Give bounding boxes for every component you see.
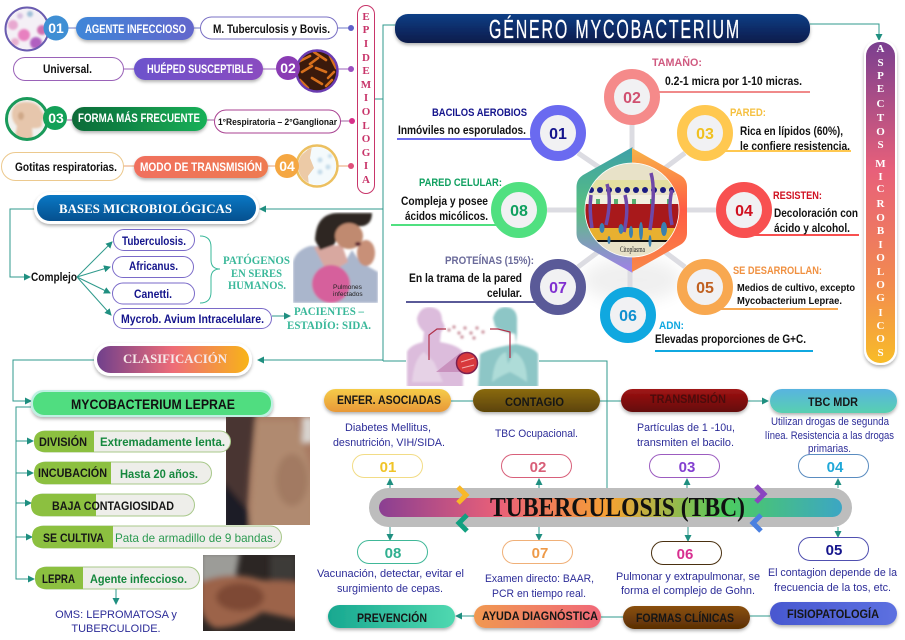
- item 03 pared: PARED:: [730, 107, 766, 119]
- icon ring 4: [296, 146, 338, 186]
- text: ayuda diagnostica detail: Examen directo: BAAR,: [485, 573, 594, 585]
- text: formas clinicas detail: [616, 571, 760, 597]
- text: tbc mdr detail: [765, 416, 894, 455]
- item 02 tamano: TAMAÑO:: [652, 56, 702, 69]
- panel: tuberculosis bottom pills: [328, 602, 897, 629]
- photo: arm lesion 2: [203, 555, 295, 631]
- panel: aspectos microbiologicos: E: [877, 83, 884, 95]
- item 07 proteinas: celular.: [487, 288, 522, 300]
- icon: head: [8, 100, 45, 138]
- dot 4: [348, 163, 354, 169]
- complejo arrows: [77, 242, 112, 315]
- item 05 se desarrollan: Mycobacterium Leprae.: [737, 296, 842, 307]
- item 07 proteinas: 07: [549, 280, 567, 297]
- number 02: 02: [280, 60, 296, 76]
- brace: [200, 236, 220, 303]
- item 05 se desarrollan: SE DESARROLLAN:: [733, 265, 822, 277]
- text: prevencion detail: Vacunación, detectar, evitar el: [317, 568, 464, 580]
- text: prevencion detail: [317, 568, 464, 595]
- hub spokes: [547, 125, 716, 287]
- pill: huesped susceptible: [134, 58, 263, 80]
- icon: microscope cells: [6, 8, 46, 50]
- pill: se cultiva: Pata de armadillo de 9 bandas.: [115, 531, 276, 545]
- pill: tuberculosis: [114, 230, 194, 250]
- panel: aspectos microbiologicos: A: [877, 43, 885, 55]
- number pills bottom: [358, 538, 868, 564]
- panel: aspectos microbiologicos: P: [877, 70, 884, 82]
- pill: tbc mdr: TBC MDR: [808, 397, 859, 409]
- number 01: 01: [48, 20, 64, 36]
- pill: lepra: [35, 567, 200, 589]
- item 04 resisten: 04: [735, 203, 753, 220]
- pill: agente infeccioso: [76, 17, 194, 40]
- icon: bacteria: [298, 52, 336, 90]
- leprae branch lines: [16, 407, 34, 579]
- pill: africanus: [112, 256, 194, 278]
- text: enfer asociadas detail: Diabetes Mellitus,: [345, 422, 431, 434]
- pill: prevencion: PREVENCIÓN: [357, 612, 427, 625]
- pill: division: [34, 431, 230, 452]
- pill 03: 03: [679, 459, 695, 476]
- item 05 se desarrollan: 05: [696, 280, 714, 297]
- arrow: lepra to oms: [115, 589, 117, 604]
- pill: contagio: CONTAGIO: [505, 397, 564, 409]
- photo: arm lesion 1: [226, 417, 310, 525]
- panel: aspectos microbiologicos: I: [878, 171, 883, 183]
- arrows: bar to pills: [390, 479, 838, 541]
- item 02 tamano: 02: [623, 90, 641, 107]
- pill: canetti: Canetti.: [134, 287, 172, 301]
- pill: se cultiva: SE CULTIVA: [43, 533, 104, 545]
- panel: bases microbiologicas: [34, 192, 259, 224]
- item 07 proteinas: [406, 254, 581, 310]
- text: formas clinicas detail: forma el complejo de Gohn.: [621, 585, 755, 597]
- panel: aspectos microbiologicos: B: [877, 225, 885, 237]
- arrow: avium to pacientes: [272, 315, 290, 317]
- pill 08: 08: [385, 545, 401, 562]
- pill 06: [652, 542, 722, 564]
- dot 3: [349, 118, 355, 124]
- pill: tuberculosis: Tuberculosis.: [122, 234, 186, 248]
- panel: aspectos microbiologicos: [864, 40, 897, 365]
- item 08 pared celular: [391, 177, 542, 233]
- pill 06: 06: [677, 546, 693, 563]
- panel: aspectos microbiologicos: S: [877, 57, 884, 69]
- text: patogenos: PATÓGENOS: [223, 253, 290, 267]
- pill: baja contagiosidad: [31, 494, 194, 516]
- panel: epidemiologia vertical label: O: [362, 133, 371, 145]
- pill: tbc mdr: [770, 389, 897, 413]
- pill: modo de transmision: MODO DE TRANSMISIÓN: [140, 159, 262, 174]
- icon ring 2: [296, 50, 338, 92]
- pill: incubacion: Hasta 20 años.: [120, 467, 198, 481]
- pill: baja contagiosidad: BAJA CONTAGIOSIDAD: [52, 501, 174, 513]
- pill: prevencion: [328, 605, 455, 628]
- panel: aspectos microbiologicos: I: [878, 239, 883, 251]
- pill 01: [352, 454, 422, 478]
- pill: lepra: LEPRA: [42, 574, 75, 586]
- text: contagio detail: TBC Ocupacional.: [495, 428, 578, 440]
- panel: epidemiologia vertical label: G: [362, 147, 371, 159]
- panel: epidemiologia vertical label: I: [364, 38, 368, 50]
- pill 04: [798, 454, 868, 478]
- text: ayuda diagnostica detail: PCR en tiempo real.: [492, 588, 586, 600]
- pill 02: [502, 454, 572, 478]
- central bar: tuberculosis: [369, 486, 852, 531]
- panel: aspectos microbiologicos: O: [876, 252, 885, 264]
- pill 03: [650, 454, 720, 478]
- item 02 tamano: [609, 56, 810, 120]
- image: coughing woman: Pulmones: [333, 284, 363, 291]
- number 04: 04: [279, 158, 295, 174]
- text: patogenos: [223, 253, 290, 292]
- pill 07: 07: [532, 545, 548, 562]
- panel: epidemiologia rows: [2, 7, 355, 188]
- panel: epidemiologia vertical label: O: [362, 106, 371, 118]
- dot 2: [348, 66, 354, 72]
- icon ring 3: [6, 98, 48, 140]
- panel: mycobacterium leprae: [31, 390, 273, 417]
- item 01 bacilos aerobios: 01: [549, 126, 567, 143]
- diagram: central hexagon: [577, 148, 687, 272]
- number 01: [44, 16, 68, 40]
- pill 08: [358, 540, 428, 564]
- text: pacientes: [287, 304, 371, 332]
- text: pacientes: PACIENTES –: [294, 304, 365, 318]
- panel: aspectos microbiologicos: C: [877, 98, 885, 110]
- pill: universal: Universal.: [43, 62, 92, 76]
- pill: gotitas: Gotitas respiratorias.: [15, 160, 117, 174]
- pill: formas clinicas: [623, 606, 750, 629]
- text: patogenos: HUMANOS.: [228, 278, 286, 292]
- pill: transmision: TRANSMISIÓN: [650, 393, 726, 406]
- pill 02: 02: [530, 459, 546, 476]
- illustration: airborne transmission lungs: [406, 307, 539, 390]
- panel: tuberculosis top pills: [324, 389, 897, 413]
- item 06 adn: 06: [619, 308, 637, 325]
- text: oms: [55, 609, 177, 635]
- pill: universal: [14, 58, 124, 80]
- pill: transmision: [621, 389, 748, 412]
- panel: epidemiologia vertical label: L: [362, 120, 370, 132]
- image: coughing woman: [293, 212, 378, 303]
- text: ayuda diagnostica detail: [485, 573, 594, 600]
- pill 05: [798, 538, 868, 560]
- text: enfer asociadas detail: desnutrición, VIH/SIDA.: [333, 437, 445, 449]
- panel: aspectos microbiologicos: S: [877, 139, 884, 151]
- item 03 pared: le confiere resistencia.: [740, 141, 850, 153]
- panel: epidemiologia vertical label: P: [363, 24, 370, 36]
- panel: epidemiologia vertical label: I: [364, 92, 368, 104]
- text: prevencion detail: surgimiento de cepas.: [337, 583, 443, 595]
- item 03 pared: [682, 107, 851, 156]
- title: [395, 14, 810, 44]
- row 2 connector: [124, 68, 351, 70]
- pill: agente infeccioso: AGENTE INFECCIOSO: [85, 22, 186, 36]
- row 3 connector: [67, 120, 352, 121]
- item 07 proteinas: En la trama de la pared: [409, 273, 522, 285]
- item 04 resisten: ácido y alcohol.: [774, 223, 850, 235]
- pill: incubacion: [34, 462, 212, 484]
- item 03 pared: Rica en lípidos (60%),: [740, 126, 843, 138]
- dot 1: [348, 25, 354, 31]
- pill: forma mas frecuente: [72, 107, 207, 131]
- panel: epidemiologia vertical label: E: [362, 11, 370, 23]
- pill: division: DIVISIÓN: [39, 436, 87, 449]
- cell wall illustration: Citoplasma: [620, 245, 645, 254]
- icon: cough: [298, 147, 336, 185]
- item 06 adn: ADN:: [659, 320, 684, 332]
- panel: bases microbiologicas: BASES MICROBIOLÓGICAS: [59, 201, 232, 216]
- panel: aspectos microbiologicos: G: [876, 292, 885, 304]
- pill 01: 01: [380, 459, 396, 476]
- pill: forma mas frecuente: FORMA MÁS FRECUENTE: [78, 110, 200, 125]
- panel: aspectos microbiologicos: C: [877, 183, 885, 195]
- panel: epidemiologia vertical label: A: [362, 174, 370, 186]
- connector lines: [10, 24, 879, 503]
- item 05 se desarrollan: [682, 264, 855, 310]
- pill 04: 04: [827, 459, 844, 476]
- heading: clasificacion: [94, 343, 252, 376]
- panel: epidemiologia vertical label: I: [364, 160, 368, 172]
- central bar: tuberculosis: TUBERCULOSIS (TBC): [490, 492, 745, 522]
- item 08 pared celular: PARED CELULAR:: [419, 177, 502, 189]
- item 08 pared celular: 08: [510, 203, 528, 220]
- text: formas clinicas detail: Pulmonar y extrapulmonar, se: [616, 571, 760, 583]
- item 04 resisten: RESISTEN:: [773, 190, 822, 202]
- pill: canetti: [112, 283, 194, 304]
- item 05 se desarrollan: Medios de cultivo, excepto: [737, 283, 855, 294]
- pill: ayuda diagnostica: AYUDA DIAGNÓSTICA: [482, 610, 598, 623]
- panel: aspectos microbiologicos: I: [878, 307, 883, 319]
- pill: se cultiva: [32, 526, 282, 548]
- hub shadow: [582, 258, 682, 302]
- pill 07: [502, 540, 572, 564]
- panel: aspectos microbiologicos: O: [876, 212, 885, 224]
- pill: incubacion: INCUBACIÓN: [38, 467, 107, 480]
- item 07 proteinas: PROTEÍNAS (15%):: [445, 254, 534, 267]
- panel: epidemiologia vertical label: D: [362, 52, 370, 64]
- number 03: [43, 106, 67, 130]
- panel: epidemiologia vertical label: [358, 6, 374, 194]
- text: fisiopatologia detail: frecuencia de la tos, etc.: [774, 582, 891, 594]
- pill: fisiopatologia: [770, 602, 897, 625]
- pill: contagio: [473, 389, 600, 412]
- text: fisiopatologia detail: [768, 567, 898, 594]
- panel: mycobacterium leprae: MYCOBACTERIUM LEPRAE: [71, 396, 235, 412]
- pill: mycrob avium: Mycrob. Avium Intracelulare.: [121, 312, 264, 326]
- title: GÉNERO MYCOBACTERIUM: [489, 14, 741, 44]
- text: transmision detail: Partículas de 1 -10u,: [637, 422, 735, 434]
- item 04 resisten: Decoloración con: [774, 208, 858, 220]
- text: oms: OMS: LEPROMATOSA y: [55, 609, 177, 621]
- text: enfer asociadas detail: [333, 422, 445, 449]
- number 03: 03: [48, 110, 64, 126]
- pill: respiratoria: [214, 110, 340, 133]
- text: patogenos: EN SERES: [231, 266, 282, 280]
- item 01 bacilos aerobios: BACILOS AEROBIOS: [432, 107, 527, 119]
- pill: m. tuberculosis: M. Tuberculosis y Bovis.: [213, 22, 330, 36]
- pill: mycrob avium: [114, 308, 272, 328]
- item 02 tamano: 0.2-1 micra por 1-10 micras.: [665, 76, 802, 88]
- panel: aspectos microbiologicos: O: [876, 279, 885, 291]
- pill: lepra: Agente infeccioso.: [90, 572, 187, 586]
- pill: africanus: Africanus.: [129, 259, 178, 273]
- panel: epidemiologia vertical label: M: [361, 79, 372, 91]
- pill: m. tuberculosis: [200, 17, 338, 39]
- number 04: [275, 154, 299, 178]
- item 06 adn: [605, 292, 813, 351]
- pill: formas clinicas: FORMAS CLÍNICAS: [636, 612, 734, 625]
- item 01 bacilos aerobios: Inmóviles no esporulados.: [398, 125, 526, 137]
- heading: clasificacion: CLASIFICACIÓN: [123, 351, 228, 366]
- pill: modo de transmision: [134, 156, 268, 178]
- complejo label: Complejo: [31, 272, 77, 284]
- panel: aspectos microbiologicos: R: [877, 198, 886, 210]
- pill: gotitas: [2, 152, 124, 180]
- panel: aspectos microbiologicos: C: [877, 320, 885, 332]
- text: fisiopatologia detail: El contagion depende de la: [768, 567, 898, 579]
- item 08 pared celular: Compleja y posee: [401, 196, 488, 208]
- panel: aspectos microbiologicos: L: [877, 266, 884, 278]
- row 1 connector: [68, 27, 351, 29]
- icon ring 1: [6, 8, 48, 50]
- item 01 bacilos aerobios: [397, 107, 581, 156]
- pill: enfer asociadas: [324, 389, 451, 412]
- item 03 pared: 03: [696, 126, 714, 143]
- pill: division: Extremadamente lenta.: [100, 435, 225, 449]
- item 06 adn: Elevadas proporciones de G+C.: [655, 334, 806, 346]
- row 4 connector: [123, 165, 351, 167]
- chevrons: [458, 487, 466, 503]
- panel: aspectos microbiologicos: O: [876, 126, 885, 138]
- text: tbc mdr detail: primarias.: [808, 443, 851, 455]
- pill: ayuda diagnostica: [474, 605, 601, 628]
- text: oms: TUBERCULOIDE.: [71, 623, 161, 635]
- text: pacientes: ESTADÍO: SIDA.: [287, 318, 371, 332]
- pill: huesped susceptible: HUÉPED SUSCEPTIBLE: [147, 61, 253, 76]
- item 04 resisten: [721, 187, 859, 235]
- panel: aspectos microbiologicos: T: [877, 112, 885, 124]
- text: transmision detail: transmiten el bacilo.: [637, 437, 734, 449]
- text: tbc mdr detail: Utilizan drogas de segunda: [771, 416, 890, 428]
- item 08 pared celular: ácidos micólicos.: [405, 211, 488, 223]
- pill: respiratoria: 1°Respiratoria – 2°Ganglionar: [218, 117, 337, 128]
- pill: fisiopatologia: FISIOPATOLOGÍA: [787, 608, 879, 621]
- number pills top: [352, 454, 868, 478]
- panel: aspectos microbiologicos: M: [875, 158, 886, 170]
- pill: enfer asociadas: ENFER. ASOCIADAS: [337, 395, 441, 407]
- panel: aspectos microbiologicos: S: [877, 347, 884, 359]
- number 02: [276, 56, 300, 80]
- panel: epidemiologia vertical label: E: [362, 65, 370, 77]
- panel: aspectos microbiologicos: O: [876, 333, 885, 345]
- image: coughing woman: infectados: [333, 291, 363, 298]
- text: transmision detail: [637, 422, 735, 449]
- pill 05: 05: [826, 542, 842, 559]
